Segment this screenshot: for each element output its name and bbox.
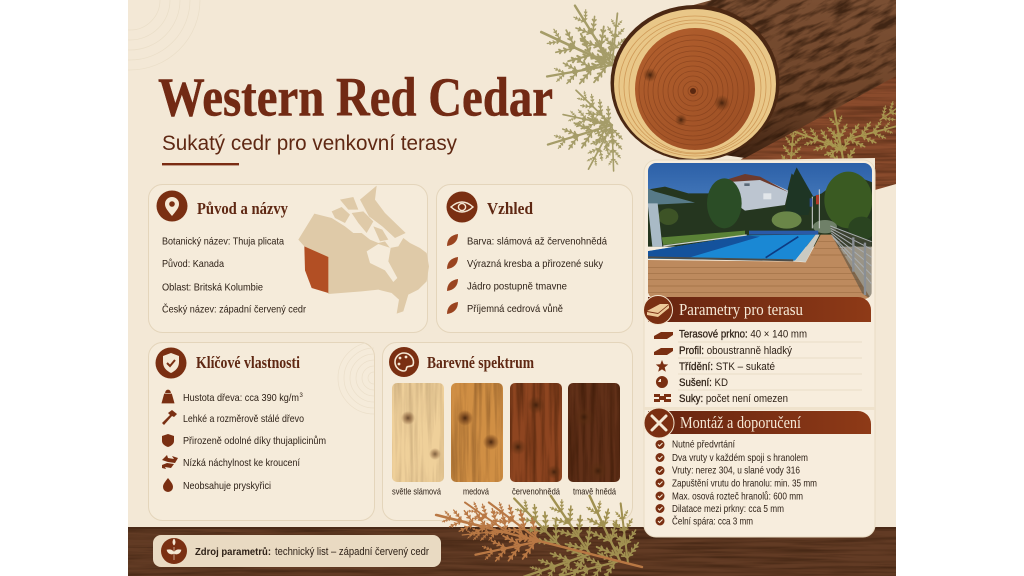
icon: eye	[446, 192, 478, 222]
recommendation rows: Vruty: nerez 304, u slané vody 316	[672, 464, 800, 476]
swatch: tmavě hnědá	[568, 383, 620, 482]
map of Canada	[298, 186, 429, 314]
parameter rows	[679, 328, 807, 405]
title underline	[162, 163, 239, 165]
banner: Montáž a doporučení	[680, 413, 801, 432]
cedar sprigs by the log	[540, 4, 626, 172]
text rows: Přirozeně odolné díky thujaplicinům	[183, 435, 326, 447]
panel: parametry pro terasu	[644, 296, 871, 405]
swatch labels: světle slámová	[392, 486, 442, 498]
panel: barevné spektrum	[382, 342, 632, 520]
text rows: Výrazná kresba a přirozené suky	[467, 258, 604, 270]
swatch labels: červenohnědá	[512, 486, 561, 498]
icon: wrench and screwdriver	[644, 408, 674, 438]
subtitle: Sukatý cedr pro venkovní terasy	[162, 132, 457, 155]
icon: sprout	[161, 538, 187, 564]
source text: technický list – západní červený cedr	[275, 546, 429, 558]
recommendation rows	[672, 438, 817, 528]
text rows	[162, 236, 306, 316]
heading: Původ a názvy	[197, 199, 289, 218]
parameter icons	[654, 332, 673, 402]
text rows	[467, 236, 607, 315]
text rows: Český název: západní červený cedr	[162, 302, 306, 316]
right column card	[644, 160, 878, 537]
banner	[644, 296, 871, 324]
text rows: Hustota dřeva: cca 390 kg/m	[183, 392, 299, 404]
banner	[644, 408, 871, 438]
recommendation rows: Dva vruty v každém spoji s hranolem	[672, 452, 808, 464]
recommendation rows: Max. osová rozteč hranolů: 600 mm	[672, 490, 803, 502]
text rows: Původ: Kanada	[162, 258, 224, 270]
wood background behind log	[740, 76, 896, 190]
swatch: světle slámová	[392, 383, 444, 482]
cedar sprig bottom	[433, 487, 642, 576]
parameter rows: Suky: počet není omezen	[679, 393, 788, 405]
swatch labels	[392, 488, 616, 494]
parameter rows: Sušení: KD	[679, 377, 728, 389]
icon: shield check	[156, 348, 186, 378]
parameter rows: Terasové prkno: 40 × 140 mm	[679, 328, 807, 340]
title: Western Red Cedar	[158, 66, 553, 128]
icon: palette	[389, 347, 419, 377]
recommendation rows: Nutné předvrtání	[672, 438, 735, 450]
banner: Parametry pro terasu	[679, 300, 803, 319]
text rows: 3	[300, 393, 304, 399]
terrace photo	[645, 160, 878, 300]
text rows	[183, 392, 326, 492]
parameter rows: Třídění: STK – sukaté	[679, 361, 775, 373]
British Columbia highlighted	[304, 246, 328, 293]
icon: location pin	[156, 190, 188, 222]
heading: Barevné spektrum	[427, 353, 534, 372]
swatch labels: medová	[463, 486, 490, 498]
text rows: Botanický název: Thuja plicata	[162, 236, 284, 248]
recommendation rows: Dilatace mezi prkny: cca 5 mm	[672, 503, 784, 515]
property icons	[162, 390, 178, 492]
bottom wood band	[128, 527, 896, 576]
recommendation rows: Čelní spára: cca 3 mm	[672, 514, 753, 528]
page background	[128, 0, 896, 576]
text rows: Příjemná cedrová vůně	[467, 303, 563, 315]
text rows: Barva: slámová až červenohnědá	[467, 236, 607, 248]
check icons	[656, 440, 664, 526]
heading: Klíčové vlastnosti	[196, 353, 300, 372]
swatch labels: tmavě hnědá	[573, 486, 617, 498]
heading: Vzhled	[487, 199, 533, 218]
parameter rows: Profil: oboustranně hladký	[679, 345, 792, 357]
icon: plank	[644, 296, 672, 324]
source pill	[153, 535, 441, 567]
text rows: Jádro postupně tmavne	[467, 280, 567, 292]
panel: vzhled	[436, 184, 632, 332]
Hudson Bay	[367, 244, 397, 282]
leaf bullets	[447, 234, 458, 314]
swatch: medová	[451, 383, 503, 482]
source text	[195, 547, 429, 558]
swatch: červenohnědá	[510, 383, 562, 482]
panel: montáž a doporučení	[644, 408, 871, 528]
text rows: Lehké a rozměrově stálé dřevo	[183, 413, 304, 425]
panel: klíčové vlastnosti	[148, 342, 375, 521]
text rows: Neobsahuje pryskyřici	[183, 480, 271, 492]
text rows: Oblast: Britská Kolumbie	[162, 282, 263, 294]
source text: Zdroj parametrů:	[195, 546, 271, 558]
text rows: Nízká náchylnost ke kroucení	[183, 457, 300, 469]
log illustration	[610, 0, 896, 160]
panel: původ a názvy	[148, 184, 429, 332]
recommendation rows: Zapuštění vrutu do hranolu: min. 35 mm	[672, 478, 817, 490]
